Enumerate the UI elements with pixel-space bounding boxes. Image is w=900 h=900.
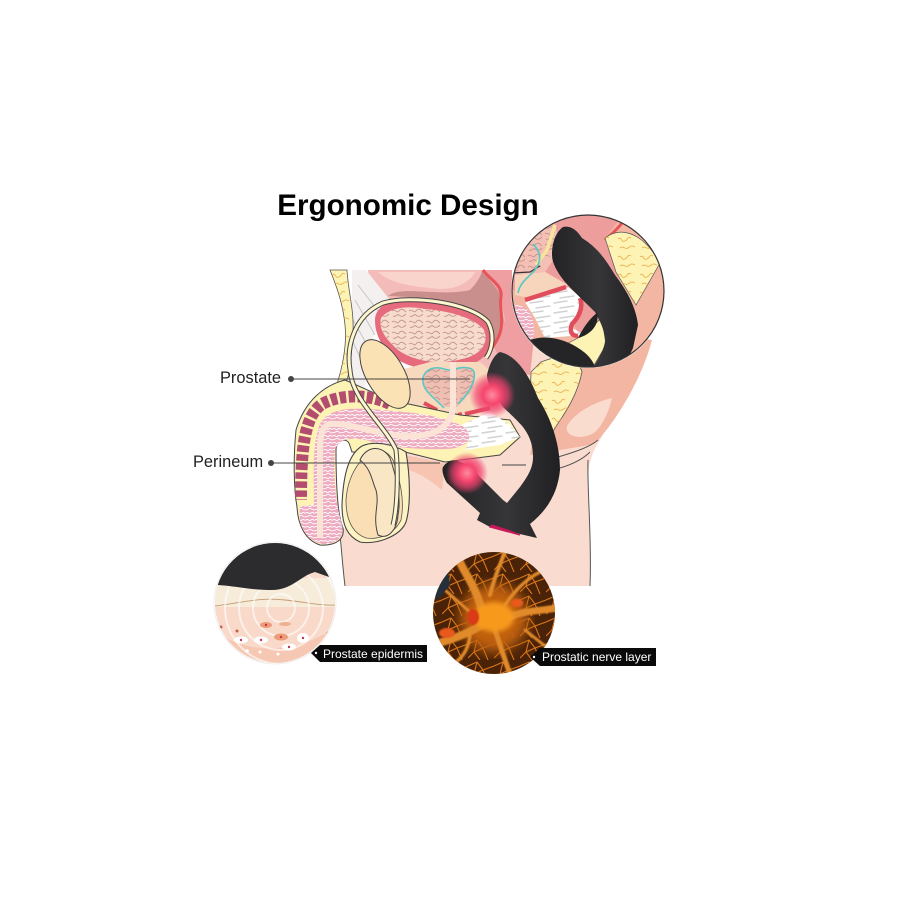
epididymis — [360, 448, 399, 536]
spongy tissue — [300, 409, 470, 544]
prostatic nerve layer label: Prostatic nerve layer — [542, 650, 651, 664]
inset teal outline — [518, 244, 540, 293]
outer penile contour — [294, 380, 520, 545]
prostate — [422, 368, 475, 407]
pelvic floor tissue — [395, 362, 490, 415]
pelvic floor red segments — [424, 403, 490, 415]
tissue base — [215, 543, 337, 665]
device surface — [218, 543, 330, 590]
buttock area — [530, 330, 652, 455]
perineum label — [193, 453, 526, 471]
inset dark line — [512, 266, 540, 273]
nerve red spot left — [467, 609, 479, 625]
tissue line — [215, 599, 337, 606]
inset device cavity — [578, 313, 598, 338]
nerve red spot right — [511, 599, 523, 607]
red wall line — [483, 270, 502, 352]
vas deferens tube — [349, 300, 492, 525]
vibration glow upper — [469, 372, 515, 418]
inset fat texture — [605, 236, 658, 302]
device base accent — [490, 525, 520, 535]
muscle area — [345, 270, 390, 388]
lower salmon layer — [226, 632, 328, 663]
inset red wall — [525, 287, 581, 336]
nerve main branches — [438, 552, 555, 673]
white tissue right — [461, 412, 520, 450]
upper pale layer — [215, 578, 337, 607]
inset background — [512, 222, 664, 366]
vibration glow lower — [446, 452, 488, 494]
prostate massager device — [442, 352, 560, 538]
erectile ribbed tissue — [301, 396, 390, 500]
inset fat layer — [605, 232, 660, 305]
magnified inset circle — [510, 212, 666, 372]
inset rectal wall — [512, 216, 620, 364]
white tissue lines — [461, 412, 520, 450]
inset prostate — [514, 223, 557, 275]
inset device — [552, 227, 638, 372]
nerve cells — [220, 622, 330, 656]
vas deferens fill — [349, 300, 492, 525]
inset yellow strip — [536, 225, 555, 265]
inset device lower arm — [530, 338, 594, 366]
inset red line — [605, 223, 622, 240]
vibration rings — [224, 574, 334, 663]
spongy tissue texture — [300, 409, 470, 544]
muted pelvic wall — [388, 270, 505, 345]
inset ring — [512, 215, 664, 367]
perineum shadow — [405, 455, 445, 490]
fat layer right texture — [530, 356, 582, 432]
inset prostate texture — [515, 226, 555, 272]
inset spongy tissue — [515, 305, 534, 343]
fat layer right — [530, 356, 582, 432]
prostate label — [220, 369, 470, 387]
perineum label: Perineum — [193, 453, 263, 471]
nerve dark corner — [436, 572, 450, 600]
inset white tissue — [525, 287, 585, 338]
inset tan layer — [515, 272, 568, 298]
prostate texture — [422, 368, 475, 407]
infographic canvas — [194, 194, 665, 674]
prostatic nerve layer label — [530, 648, 656, 666]
nerve cell body — [474, 602, 514, 632]
nerve red spot lower — [439, 628, 455, 638]
bladder — [375, 298, 491, 370]
tissue highlight — [378, 272, 475, 289]
title: Ergonomic Design — [277, 189, 539, 222]
anatomical cross-section diagram — [294, 270, 652, 586]
buttock highlight — [567, 398, 612, 437]
body contour lines — [340, 440, 598, 586]
pubic bone — [350, 332, 420, 416]
nerve cell circle — [432, 552, 556, 680]
nerve glow — [460, 584, 528, 652]
rectal wall pink — [483, 270, 535, 375]
inset grey lines — [529, 287, 581, 338]
urethra tube — [320, 362, 453, 538]
upper pelvic tissue — [368, 270, 512, 400]
inset lower yellow band — [568, 320, 606, 366]
fat layer texture — [330, 270, 353, 384]
skin layer circle — [214, 535, 337, 665]
lower body silhouette — [340, 340, 650, 586]
fat layer left — [330, 270, 353, 384]
nerve web texture — [433, 552, 555, 674]
prostate label: Prostate — [220, 369, 281, 387]
prostate epidermis label: Prostate epidermis — [323, 647, 423, 661]
scrotal contour — [342, 443, 409, 543]
testis — [346, 450, 402, 538]
inset spongy texture — [515, 305, 534, 343]
prostate teal outline — [423, 368, 474, 408]
muscle lines — [352, 285, 385, 370]
